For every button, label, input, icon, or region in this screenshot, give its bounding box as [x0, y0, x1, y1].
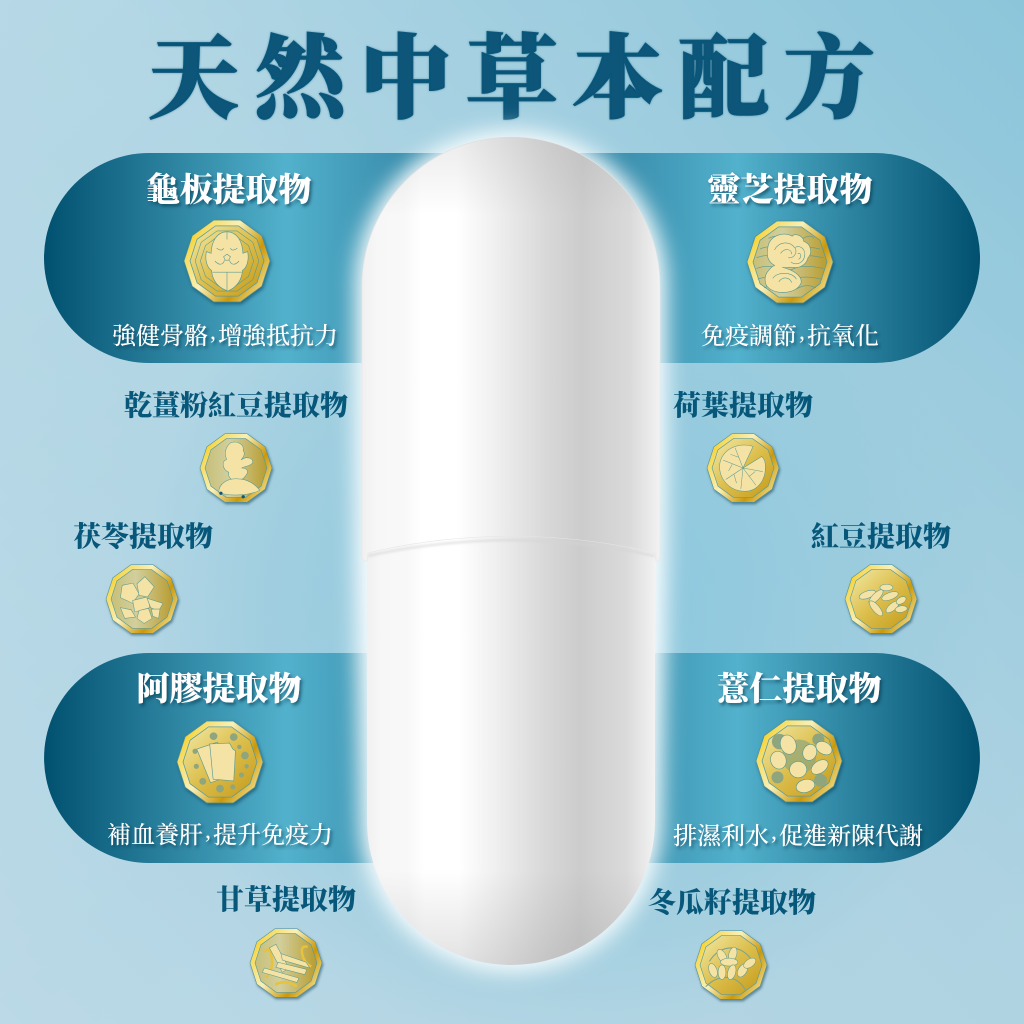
- icon: ginger coin: [200, 434, 272, 502]
- text: ejiao benefit: ,: [205, 818, 211, 844]
- icon: poria coin: [106, 565, 178, 633]
- panel: bottom right band: [524, 653, 980, 863]
- text: lotus leaf heading: 荷葉提取物: [673, 389, 813, 422]
- text: ejiao heading: 阿膠提取物: [136, 671, 302, 708]
- title: 天然中草本配方: [148, 29, 890, 130]
- text: ejiao benefit: 提升免疫力: [213, 822, 333, 849]
- text: lingzhi benefit: ,: [799, 319, 805, 345]
- text: winter melon seed heading: 冬瓜籽提取物: [648, 886, 816, 919]
- text: coix seed heading: 薏仁提取物: [716, 671, 882, 708]
- panel: top right band: [524, 153, 980, 363]
- text: coix seed benefit: 排濕利水: [673, 824, 769, 850]
- icon: red bean coin: [845, 565, 917, 633]
- text: coix seed benefit: 促進新陳代謝: [779, 823, 923, 850]
- capsule lower half: [367, 530, 655, 965]
- panel: top left band: [44, 153, 500, 363]
- icon: turtle shell coin: [184, 220, 270, 302]
- capsule: [362, 137, 660, 965]
- icon: licorice coin: [250, 929, 322, 997]
- text: turtle shell benefit: ,: [210, 319, 216, 345]
- text: lingzhi heading: 靈芝提取物: [708, 171, 872, 209]
- text: dried ginger heading: 乾薑粉紅豆提取物: [124, 389, 348, 422]
- text: lingzhi benefit: 免疫調節: [701, 324, 797, 350]
- text: red bean heading: 紅豆提取物: [811, 520, 951, 553]
- capsule glow: [362, 137, 660, 965]
- text: turtle shell benefit: 強健骨骼: [112, 324, 208, 350]
- text: turtle shell benefit: 增強抵抗力: [218, 323, 338, 350]
- text: lingzhi benefit: 抗氧化: [807, 323, 879, 350]
- icon: coix seed coin: [756, 720, 842, 802]
- text: ejiao benefit: 補血養肝: [107, 823, 203, 849]
- capsule upper half: [362, 137, 660, 561]
- text: poria heading: 茯苓提取物: [73, 520, 213, 553]
- text: coix seed benefit: ,: [771, 819, 777, 845]
- text: licorice heading: 甘草提取物: [216, 883, 356, 916]
- icon: winter melon seed coin: [695, 931, 767, 999]
- icon: ejiao coin: [177, 721, 263, 803]
- icon: lingzhi coin: [747, 221, 833, 303]
- text: turtle shell heading: 龜板提取物: [146, 171, 312, 209]
- icon: lotus leaf coin: [707, 434, 779, 502]
- panel: bottom left band: [44, 653, 500, 863]
